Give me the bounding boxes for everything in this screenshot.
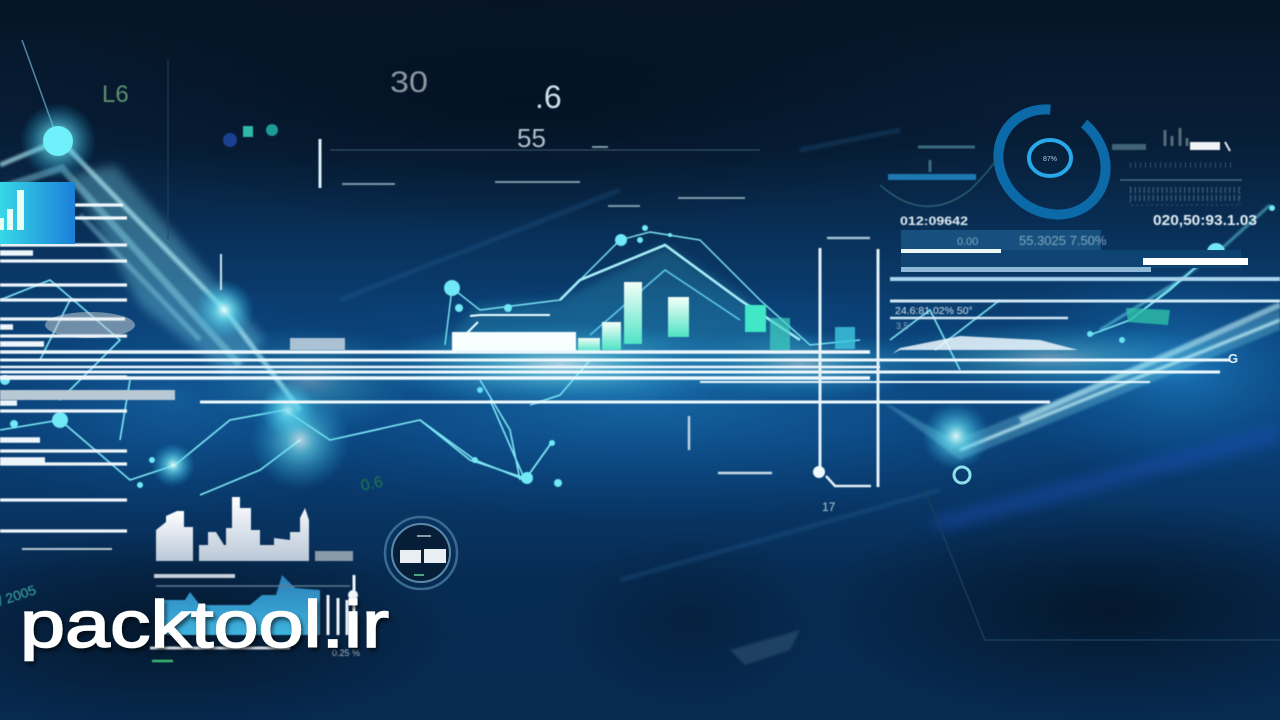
white histogram, bottom left bbox=[154, 497, 353, 578]
floating numbers: 17 bbox=[822, 500, 836, 514]
floating numbers bbox=[0, 66, 1238, 609]
data table, right: 0.00 bbox=[957, 236, 978, 248]
glow diagonal band, right bbox=[880, 205, 1280, 460]
data table, right: 55.3025 7.50% bbox=[1019, 233, 1107, 248]
donut gauge: 87% bbox=[1043, 156, 1057, 163]
left arrow lines bbox=[0, 205, 127, 549]
teal markers, top left bbox=[223, 124, 278, 147]
floating numbers: 0.6 bbox=[359, 474, 385, 495]
data table, right: 020,50:93.1.03 bbox=[1153, 212, 1257, 229]
blue histogram, bottom left: 0.25 % bbox=[332, 648, 360, 658]
small square bar widget bbox=[0, 182, 75, 244]
blue histogram, bottom left bbox=[150, 575, 360, 661]
data table, right: 24.6:81.02% 50° bbox=[895, 305, 973, 317]
floating numbers: .6 bbox=[535, 79, 562, 115]
floating numbers: 55 bbox=[517, 123, 546, 153]
glow diagonal band, left bbox=[0, 40, 300, 410]
center bar chart bbox=[290, 282, 855, 352]
network nodes bbox=[0, 205, 1275, 488]
small gauge icon bbox=[385, 517, 457, 589]
horizontal data lines bbox=[0, 279, 1280, 402]
tall bracket bbox=[168, 60, 878, 487]
floating numbers: L6 bbox=[102, 81, 129, 108]
floating numbers: 30 bbox=[390, 66, 428, 99]
network line chart bbox=[0, 232, 1215, 495]
ridge fill behind centre bars bbox=[440, 245, 820, 350]
watermark: packtool.ir bbox=[20, 587, 389, 661]
glowing nodes bbox=[20, 103, 1240, 490]
data table, right bbox=[895, 212, 1257, 331]
floating numbers: G bbox=[1228, 351, 1238, 366]
data table, right: 012:09642 bbox=[900, 214, 968, 228]
mini charts around gauge bbox=[880, 128, 1242, 206]
data table, right: 3.5 bbox=[896, 321, 909, 331]
donut gauge bbox=[977, 88, 1127, 236]
